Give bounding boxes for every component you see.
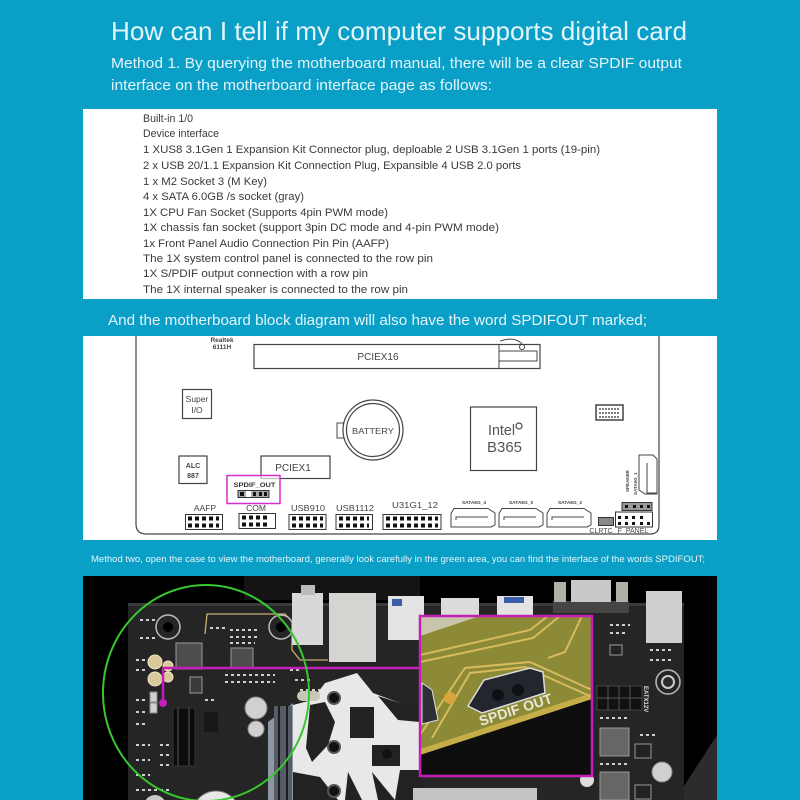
SATA labels: SATA6G_3 (509, 500, 533, 506)
panel: interface list: The 1X system control panel is connected to the row pin (143, 253, 433, 265)
header labels: U31G1_12 (392, 500, 438, 510)
slot: PCIEX1: PCIEX1 (275, 463, 311, 474)
mount holes (156, 615, 680, 694)
callout: magenta pointer line (163, 668, 420, 703)
panel: interface list: 1 XUS8 3.1Gen 1 Expansion Kit Connector plug, deploable 2 USB 3.1Gen 1 ports (19-pin) (143, 144, 600, 156)
panel: motherboard block diagram (83, 336, 717, 540)
speaker header (622, 502, 652, 510)
panel: interface list (83, 109, 717, 299)
PCIe x16 slot (268, 703, 293, 800)
small components (136, 610, 680, 790)
text block: method 2: Method two, open the case to view the motherboard, generally look carefully in the green area, you can find the interface of the words SPDIFOUT; (91, 554, 705, 565)
header labels (194, 500, 438, 513)
SATA labels (462, 500, 582, 506)
title: How can I tell if my computer supports digital card (111, 16, 687, 46)
connector (468, 668, 545, 713)
chip label: Realtek: Realtek (210, 337, 234, 344)
gold traces in inset (420, 616, 592, 738)
pin dots (188, 518, 438, 526)
chip: ALC 887 (179, 456, 207, 484)
header labels: AAFP (194, 503, 216, 513)
IO port: HDMI (441, 598, 479, 616)
chip label: Realtek: 6111H (213, 344, 232, 351)
chip: ALC 887: ALC (186, 463, 200, 470)
slot: PCIEX16: PCIEX16 (357, 352, 399, 363)
chip: ALC 887: 887 (187, 473, 199, 480)
panel: motherboard photo (83, 576, 717, 800)
panel: interface list: 1 x M2 Socket 3 (M Key) (143, 176, 267, 188)
chip: Super I/O (182, 390, 212, 418)
bottom edge standoff (580, 773, 594, 787)
header labels: USB910 (291, 503, 325, 513)
clear CMOS header: CLRTC (589, 528, 613, 535)
IO port: LAN (329, 593, 376, 662)
front panel header: F_PANEL (618, 528, 648, 535)
side labels (625, 469, 638, 495)
board outline (136, 336, 659, 534)
panel: interface list: 1x Front Panel Audio Connection Pin Pin (AAFP) (143, 238, 389, 250)
front panel header (616, 512, 652, 535)
callout: SPDIF close-up inset (420, 616, 592, 776)
left connector in inset (422, 683, 438, 724)
chip label: Realtek (210, 337, 234, 351)
slot: PCIEX1 (261, 456, 330, 478)
ATX power connector (597, 686, 648, 712)
text block: method 1: interface on the motherboard interface page as follows: (111, 77, 492, 94)
IO port: USB 3 (388, 596, 424, 640)
panel: interface list: Device interface (143, 128, 219, 140)
chip: Super I/O: Super (186, 394, 209, 404)
heading: block diagram note: And the motherboard block diagram will also have the word SPDIFOUT marked; (108, 313, 647, 329)
highlight: SPDIF_OUT: SPDIF_OUT (234, 482, 276, 489)
side labels: SATA6G_1 (633, 472, 638, 495)
board (128, 603, 684, 800)
highlight: SPDIF_OUT (227, 476, 280, 504)
callout: SPDIF close-up inset: SPDIF OUT (477, 690, 555, 729)
capacitors (148, 655, 173, 686)
IO port: VGA (553, 580, 629, 613)
callout: pointer dot (159, 699, 167, 707)
chips (176, 643, 651, 800)
chip: Intel B365: B365 (487, 439, 522, 456)
IO port: audio jack (292, 585, 323, 645)
pin headers (186, 514, 441, 530)
header labels: COM (246, 503, 266, 513)
chip: Intel B365: Intel (488, 422, 515, 439)
panel: interface list: 1X CPU Fan Socket (Supports 4pin PWM mode) (143, 207, 388, 219)
IO port: USB 3 second (497, 596, 533, 616)
SATA connectors (451, 455, 657, 527)
IO port: PS2 stack (646, 591, 682, 643)
pin header (204, 712, 218, 732)
battery socket (192, 791, 240, 800)
chip: Super I/O: I/O (191, 405, 203, 415)
bottom heatsink bar (413, 788, 537, 800)
panel: interface list: 1X S/PDIF output connection with a row pin (143, 268, 368, 280)
battery: BATTERY (352, 426, 394, 436)
gold traces (205, 614, 328, 660)
ATX power connector: EATX12V (642, 686, 648, 712)
board art: white graphic (293, 673, 420, 800)
chip: Intel B365 (470, 407, 536, 470)
panel: interface list: 4 x SATA 6.0GB /s socket (gray) (143, 191, 304, 203)
battery (337, 400, 403, 460)
board art: dark shapes over white (293, 696, 420, 800)
clear CMOS header (589, 518, 614, 535)
chip: small bios (596, 405, 623, 420)
callout: green circle (103, 585, 309, 800)
small standoff (144, 795, 166, 800)
panel: interface list: 2 x USB 20/1.1 Expansion Kit Connection Plug, Expansible 4 USB 2.0 ports (143, 160, 521, 172)
panel: interface list: 1X chassis fan socket (support 3pin DC mode and 4-pin PWM mode) (143, 222, 499, 234)
text block: method 1 (111, 55, 683, 94)
SATA labels: SATA6G_4 (462, 500, 486, 506)
panel: interface list: The 1X internal speaker is connected to the row pin (143, 284, 408, 296)
PCIe x1 slot (173, 708, 195, 766)
gold pad (444, 692, 456, 704)
text block: method 1: Method 1. By querying the motherboard manual, there will be a clear SPDIF output (111, 55, 683, 72)
capsule standoff (297, 691, 320, 701)
panel: interface list: Built-in 1/0 (143, 113, 193, 125)
header labels: USB1112 (336, 503, 374, 513)
slot: PCIEX16 (254, 339, 540, 368)
side labels: SPEAKER (625, 469, 630, 492)
SATA labels: SATA6G_2 (558, 500, 582, 506)
